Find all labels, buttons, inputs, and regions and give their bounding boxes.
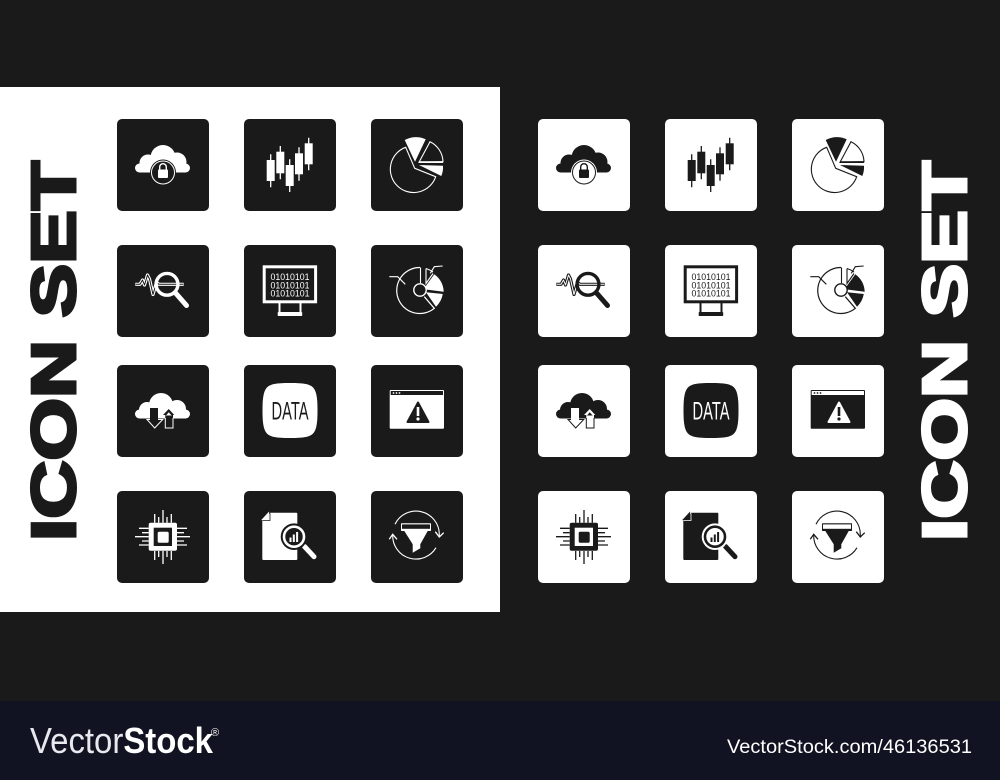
icon: document search (left) bbox=[244, 491, 336, 583]
icon: document search (right) bbox=[665, 491, 757, 583]
title: ICON SET left: ICON SET bbox=[20, 161, 89, 541]
icon: processor chip (right) bbox=[538, 491, 630, 583]
white left panel bbox=[0, 87, 500, 612]
icon: donut chart (left) bbox=[371, 245, 463, 337]
icon: browser warning (right) bbox=[792, 365, 884, 457]
icon: waveform magnifier (left) bbox=[117, 245, 209, 337]
icon: binary monitor (left): 01010101 bbox=[270, 289, 310, 299]
footer image id: VectorStock.com/46136531 bbox=[727, 737, 972, 758]
icon: binary monitor (left): 01010101 bbox=[270, 280, 310, 290]
title: ICON SET right: ICON SET bbox=[911, 161, 980, 541]
icon: waveform magnifier (right) bbox=[538, 245, 630, 337]
icon: binary monitor (left): 01010101 bbox=[270, 272, 310, 282]
icon: cloud transfer (right) bbox=[538, 365, 630, 457]
icon: data badge (right) bbox=[665, 365, 757, 457]
icon: binary monitor (right): 01010101 bbox=[692, 289, 730, 299]
icon: funnel filter (right) bbox=[792, 491, 884, 583]
icon: donut chart (right) bbox=[792, 245, 884, 337]
footer bar bbox=[0, 701, 1000, 780]
icon: cloud transfer (left) bbox=[117, 365, 209, 457]
icon: binary monitor (left) bbox=[244, 245, 336, 337]
icon: binary monitor (right): 01010101 bbox=[692, 280, 730, 290]
footer logo registered mark: ® bbox=[211, 727, 219, 739]
icon: data badge (right): DATA bbox=[692, 398, 730, 426]
icon: processor chip (left) bbox=[117, 491, 209, 583]
icon: data badge (left): DATA bbox=[272, 398, 309, 426]
icon: candlestick chart (left) bbox=[244, 119, 336, 211]
icon: candlestick chart (right) bbox=[665, 119, 757, 211]
icon: funnel filter (left) bbox=[371, 491, 463, 583]
icon: binary monitor (right) bbox=[665, 245, 757, 337]
icon: pie chart (left) bbox=[371, 119, 463, 211]
icon: data badge (left) bbox=[244, 365, 336, 457]
icon: cloud lock (right) bbox=[538, 119, 630, 211]
icon: pie chart (right) bbox=[792, 119, 884, 211]
icon: browser warning (left) bbox=[371, 365, 463, 457]
footer logo: VectorStock: VectorStock bbox=[30, 720, 214, 761]
icon: cloud lock (left) bbox=[117, 119, 209, 211]
icon: binary monitor (right): 01010101 bbox=[692, 272, 730, 282]
